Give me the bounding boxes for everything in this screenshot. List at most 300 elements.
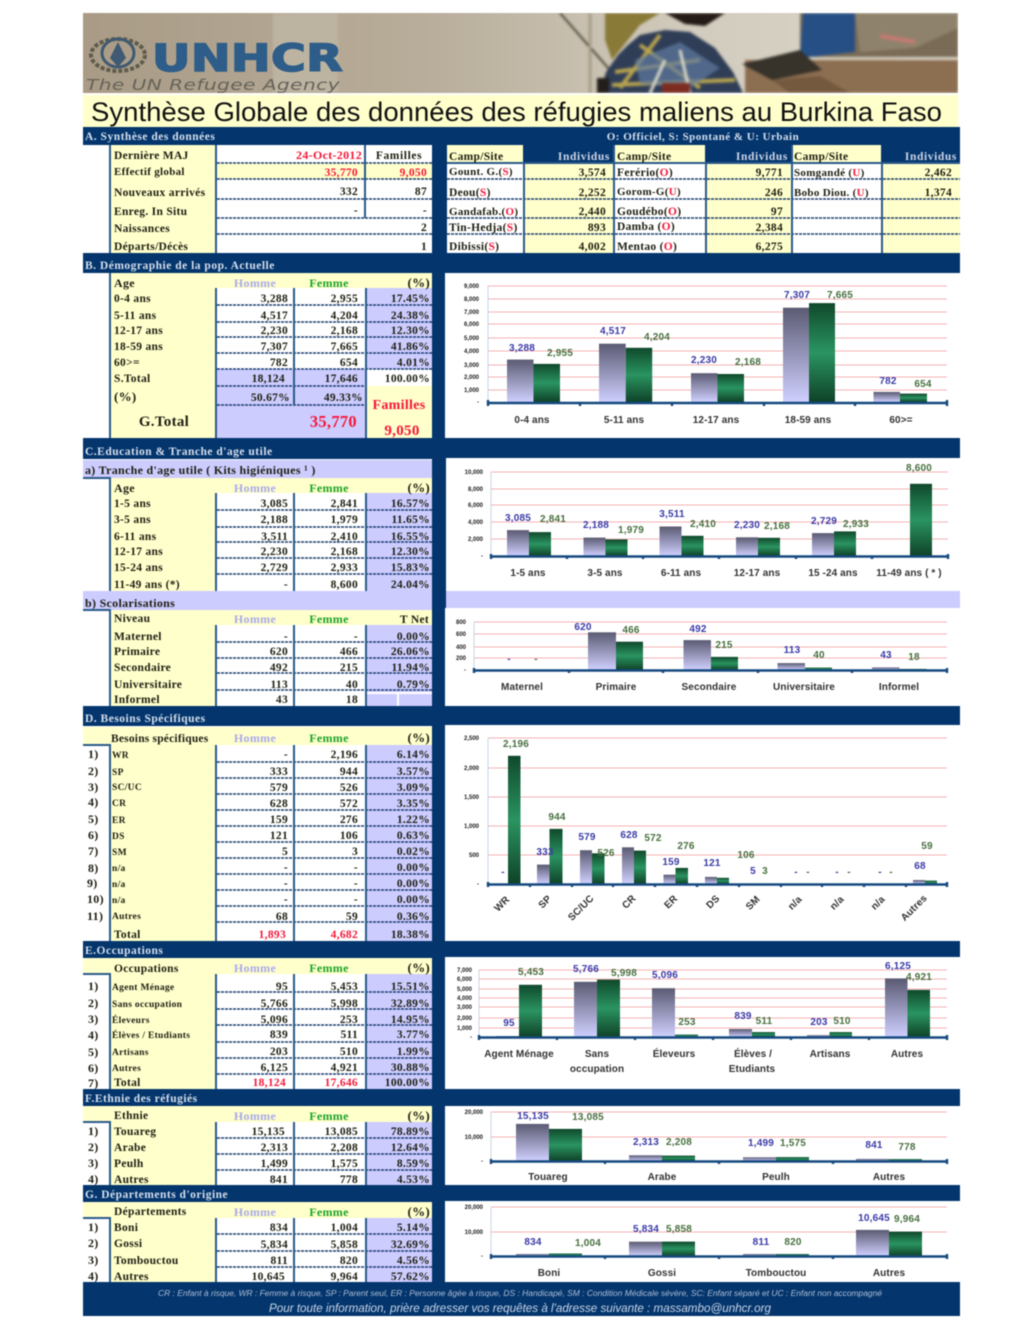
- panel: chart E occupations bars: [445, 957, 960, 1089]
- value labels: 1,575: [780, 1138, 806, 1149]
- axis tick labels: 2,000: [468, 537, 484, 543]
- category labels: Autres: [891, 1049, 923, 1060]
- data rows: 15-24 ans: [114, 562, 163, 574]
- data rows: 4.01%: [397, 357, 430, 369]
- data rows: S.Total: [114, 373, 151, 385]
- axis tick labels: -: [481, 1254, 483, 1260]
- data rows: 159: [270, 814, 288, 826]
- row numbers: 6): [88, 828, 99, 842]
- axis tick labels: 20,000: [465, 1110, 484, 1116]
- value labels: 121: [703, 858, 721, 869]
- data rows: Maternel: [114, 631, 162, 643]
- category labels: [484, 1047, 923, 1075]
- data rows: 18.38%: [391, 929, 430, 941]
- axis tick labels: 2,500: [464, 736, 480, 742]
- category labels: [538, 1268, 905, 1279]
- data rows: 18,124: [252, 373, 285, 385]
- value labels: 7,665: [827, 290, 853, 301]
- category labels, rotated: WR: [492, 894, 513, 914]
- data rows: 5.14%: [397, 1222, 430, 1234]
- axis tick labels: 10,000: [465, 1135, 484, 1141]
- data rows: DS: [112, 832, 125, 842]
- data rows: 57.62%: [391, 1271, 430, 1283]
- values: 9,050: [400, 167, 427, 179]
- data rows: 4,921: [331, 1062, 358, 1074]
- row numbers: 7): [88, 844, 99, 858]
- category labels, rotated: n/a: [828, 894, 847, 912]
- value labels: -: [534, 654, 538, 665]
- header row: [114, 480, 430, 495]
- labels: Nouveaux arrivés: [114, 187, 206, 199]
- camp rows: 1,374: [925, 187, 952, 199]
- value labels: 4,204: [644, 332, 670, 343]
- value labels: 7,307: [784, 290, 810, 301]
- row numbers: [87, 747, 104, 923]
- photo scene: tent, woman, basin and ground: [273, 13, 958, 93]
- data rows: 11-49 ans (*): [114, 579, 180, 591]
- data rows: 0.00%: [397, 894, 430, 906]
- value labels: 5,834: [633, 1224, 659, 1235]
- axis tick labels: 6,000: [457, 977, 473, 983]
- values: -: [354, 205, 358, 217]
- value labels: 113: [784, 645, 801, 656]
- data rows: 2,729: [261, 562, 288, 574]
- header row: Femme: [309, 961, 349, 975]
- data rows: 466: [340, 646, 358, 658]
- row numbers: 6): [88, 1061, 99, 1075]
- data rows: 43: [276, 694, 288, 706]
- header row: (%): [407, 730, 430, 745]
- data rows: 3,085: [261, 498, 288, 510]
- data rows: 0.02%: [397, 846, 430, 858]
- data rows: 8.59%: [397, 1158, 430, 1170]
- data rows: 215: [340, 662, 358, 674]
- sub-heading: useful age band: [83, 460, 432, 478]
- data rows: 5,858: [331, 1239, 358, 1251]
- header row: (%): [407, 275, 430, 290]
- data rows: 5-11 ans: [114, 310, 157, 322]
- header row: [114, 960, 430, 975]
- axis tick labels: [465, 470, 484, 560]
- data rows: 579: [270, 782, 288, 794]
- category labels: [528, 1172, 905, 1183]
- data rows: 778: [340, 1174, 358, 1186]
- data rows: 2,313: [261, 1142, 288, 1154]
- data rows: ER: [112, 816, 126, 826]
- value labels: 2,955: [547, 348, 573, 359]
- data rows: 113: [270, 679, 288, 691]
- data rows: 40: [346, 679, 358, 691]
- camp rows: Goudébo(O): [617, 206, 681, 218]
- data rows: 24.04%: [391, 579, 430, 591]
- data rows: 3.09%: [397, 782, 430, 794]
- values: -: [423, 205, 427, 217]
- data rows: 2,410: [331, 531, 358, 543]
- abbreviation key: CR : Enfant à risque, WR : Femme à risque, SP : Parent seul, ER : Personne âgée à risque, DS : Handicapé, SM : Condition Médicale sévère, SC: Enfant séparé et UC : Enfant non accompagné: [158, 1289, 883, 1298]
- data rows: 12.30%: [391, 325, 430, 337]
- data rows: 782: [270, 357, 288, 369]
- category labels: 12-17 ans: [693, 415, 740, 426]
- category labels: Tombouctou: [746, 1268, 806, 1279]
- row numbers: 5): [88, 1045, 99, 1059]
- data rows: 3,511: [261, 531, 288, 543]
- category labels: Artisans: [810, 1049, 851, 1060]
- data rows: 11.94%: [391, 662, 430, 674]
- value labels: 628: [620, 830, 638, 841]
- data rows: 510: [340, 1046, 358, 1058]
- value labels: 944: [548, 812, 566, 823]
- data rows: 4,517: [261, 310, 288, 322]
- grand total: G.Total: [139, 414, 189, 430]
- data rows: 12-17 ans: [114, 546, 163, 558]
- column headers: [449, 151, 957, 163]
- axis tick labels: 4,000: [468, 520, 484, 526]
- category labels: 5-11 ans: [604, 415, 644, 426]
- value labels: 5,858: [666, 1224, 692, 1235]
- labels: Enreg. In Situ: [114, 206, 188, 218]
- data rows: Universitaire: [114, 679, 182, 691]
- data rows: 620: [270, 646, 288, 658]
- category labels: [510, 568, 942, 579]
- category labels: Éleveurs: [653, 1047, 696, 1060]
- header row: Homme: [234, 731, 276, 745]
- labels: [114, 150, 206, 253]
- data rows: 2,208: [331, 1142, 358, 1154]
- header row: Homme: [234, 1205, 276, 1219]
- row numbers: [88, 979, 99, 1090]
- column headers: Camp/Site: [617, 151, 671, 163]
- value labels: 579: [578, 832, 596, 843]
- axis tick labels: 1,000: [457, 1026, 473, 1032]
- row numbers: 2): [88, 996, 99, 1010]
- value labels: 572: [644, 833, 662, 844]
- axis tick labels: 8,000: [468, 487, 484, 493]
- data rows: 944: [340, 766, 358, 778]
- header row: (%): [407, 960, 430, 975]
- category labels, rotated: n/a: [869, 894, 888, 912]
- data rows: 5,998: [331, 998, 358, 1010]
- section B heading: B. Démographie de la pop. Actuelle: [85, 260, 275, 272]
- data rows: 253: [340, 1014, 358, 1026]
- axis tick labels: 9,000: [464, 284, 480, 290]
- category labels: Etudiants: [729, 1064, 776, 1075]
- value labels: 620: [574, 622, 592, 633]
- data rows: 13,085: [325, 1126, 358, 1138]
- data rows: [88, 1124, 430, 1186]
- camp rows: 2,462: [925, 167, 952, 179]
- value labels: [524, 1213, 920, 1249]
- category labels: [501, 682, 919, 693]
- section F heading: F.Ethnie des réfugiés: [85, 1093, 198, 1105]
- value labels: [501, 739, 933, 878]
- data rows: 6.14%: [397, 749, 430, 761]
- value labels: 8,600: [906, 463, 932, 474]
- navy page frame: gutter and section bars: [83, 127, 960, 1316]
- column headers: Individus: [905, 151, 957, 163]
- column headers: Individus: [558, 151, 610, 163]
- axis tick labels: 2,000: [457, 1016, 473, 1022]
- data rows: 811: [270, 1255, 288, 1267]
- values: 35,770: [325, 167, 358, 179]
- data rows: 2,188: [261, 514, 288, 526]
- data rows: 1): [88, 1220, 99, 1234]
- grand total: 35,770: [310, 412, 357, 431]
- data rows: Autres: [114, 1271, 149, 1283]
- data rows: Élèves / Etudiants: [112, 1029, 190, 1041]
- camp rows: 2,440: [579, 206, 606, 218]
- data rows: 0.63%: [397, 830, 430, 842]
- column headers: Individus: [736, 151, 788, 163]
- data rows: n/a: [112, 864, 126, 874]
- value labels: 40: [813, 650, 825, 661]
- data rows: 0-4 ans: [114, 293, 151, 305]
- panel: B demography table: [110, 273, 432, 439]
- axis tick labels: 600: [456, 632, 467, 638]
- values: [296, 148, 427, 253]
- data rows: 6,125: [261, 1062, 288, 1074]
- data rows: 49.33%: [324, 392, 363, 404]
- header row: [111, 730, 430, 745]
- grand total: [139, 412, 357, 431]
- axis tick labels: 10,000: [465, 470, 484, 476]
- data rows: 12.30%: [391, 546, 430, 558]
- value labels: [505, 463, 932, 536]
- value labels: 253: [678, 1017, 696, 1028]
- axis tick labels: -: [481, 554, 483, 560]
- data rows: Secondaire: [114, 662, 171, 674]
- data rows: 3,288: [261, 293, 288, 305]
- panel: chart C-a useful age bars: [446, 458, 960, 591]
- axis tick labels: 400: [456, 645, 467, 651]
- panel: C-b schooling table: [83, 610, 432, 706]
- families callout: Familles: [373, 398, 426, 413]
- data rows: Informel: [114, 694, 160, 706]
- category labels: Sans: [585, 1049, 609, 1060]
- data rows: 1,499: [261, 1158, 288, 1170]
- data rows: Tombouctou: [114, 1255, 179, 1267]
- data rows: 4.53%: [397, 1174, 430, 1186]
- category labels: Élèves /: [734, 1047, 772, 1060]
- row numbers: 1): [88, 979, 99, 993]
- axis tick labels: 7,000: [464, 310, 480, 316]
- camp rows: 893: [588, 222, 606, 234]
- icon: UNHCR emblem: [91, 39, 145, 71]
- value labels: 820: [784, 1237, 802, 1248]
- data rows: Autres: [112, 1064, 141, 1074]
- value labels: 811: [753, 1237, 770, 1248]
- panel: chart B age bars: [445, 273, 960, 438]
- data rows: 32.69%: [391, 1239, 430, 1251]
- data rows: 14.95%: [391, 1014, 430, 1026]
- sub-heading: schooling band: [83, 591, 960, 610]
- data rows: Autres: [112, 912, 141, 922]
- category labels, rotated: Autres: [899, 893, 930, 924]
- axis tick labels: 4,000: [457, 996, 473, 1002]
- value labels: 510: [833, 1016, 851, 1027]
- data rows: 2): [88, 1140, 99, 1154]
- data rows: 2,933: [331, 562, 358, 574]
- data rows: SP: [112, 768, 124, 778]
- data rows: 15,135: [252, 1126, 285, 1138]
- axis tick labels: 10,000: [465, 1230, 484, 1236]
- camp rows: Bobo Diou. (U): [794, 187, 869, 199]
- data rows: 5,096: [261, 1014, 288, 1026]
- category labels: Informel: [879, 682, 919, 693]
- data rows: 2,196: [331, 749, 358, 761]
- value labels: 2,313: [633, 1137, 659, 1148]
- data rows: -: [284, 631, 288, 643]
- camp rows: Tin-Hedja(S): [449, 222, 518, 234]
- panel: chart G departments bars: [445, 1201, 960, 1282]
- data rows: 4,204: [331, 310, 358, 322]
- data rows: (%): [114, 389, 137, 404]
- value labels: 276: [677, 841, 695, 852]
- data rows: 839: [270, 1029, 288, 1041]
- axis tick labels: 800: [456, 620, 467, 626]
- data rows: 511: [340, 1029, 358, 1041]
- bars: [588, 632, 926, 670]
- data rows: 2,168: [331, 546, 358, 558]
- category labels: Secondaire: [682, 682, 737, 693]
- data rows: 17,646: [325, 373, 358, 385]
- data rows: 1.99%: [397, 1046, 430, 1058]
- data rows: SC/UC: [112, 783, 142, 793]
- category labels: Boni: [538, 1268, 560, 1279]
- category labels: Maternel: [501, 682, 543, 693]
- header row: Ethnie: [114, 1110, 148, 1122]
- axis tick labels: 1,000: [464, 388, 480, 394]
- header row: Age: [114, 276, 135, 290]
- header row: Homme: [234, 481, 276, 495]
- value labels: -: [501, 867, 505, 878]
- row numbers: 4): [88, 795, 99, 809]
- value labels: -: [835, 867, 839, 878]
- header row: Femme: [309, 276, 349, 290]
- camp rows: 6,275: [756, 241, 783, 253]
- axis tick labels: 200: [456, 656, 467, 662]
- data rows: Primaire: [114, 646, 160, 658]
- data rows: 68: [276, 911, 288, 923]
- axis tick labels: 5,000: [464, 336, 480, 342]
- data rows: Agent Ménage: [112, 983, 174, 993]
- header row: Age: [114, 481, 135, 495]
- header row: Femme: [309, 1205, 349, 1219]
- data rows: 10,645: [252, 1271, 285, 1283]
- axis tick labels: 7,000: [457, 968, 473, 974]
- value labels: 159: [662, 857, 680, 868]
- category labels: Primaire: [596, 682, 637, 693]
- category labels: 18-59 ans: [785, 415, 832, 426]
- axis tick labels: [456, 620, 467, 674]
- data rows: 15.51%: [391, 981, 430, 993]
- header row: Femme: [309, 481, 349, 495]
- row numbers: 4): [88, 1028, 99, 1042]
- data rows: 50.67%: [251, 392, 290, 404]
- value labels: 6,125: [885, 961, 911, 972]
- value labels: 5: [750, 866, 756, 877]
- category labels: Arabe: [648, 1172, 677, 1183]
- row numbers: 10): [87, 892, 104, 906]
- category labels: 0-4 ans: [514, 415, 550, 426]
- value labels: 15,135: [517, 1111, 549, 1122]
- logo wordmark: UNHCR: [152, 37, 343, 80]
- data rows: 106: [340, 830, 358, 842]
- axis tick labels: 2,000: [464, 375, 480, 381]
- data rows: 17.45%: [391, 293, 430, 305]
- data rows: 15.83%: [391, 562, 430, 574]
- bars: [496, 978, 930, 1037]
- data rows: 3.35%: [397, 798, 430, 810]
- data rows: 1): [88, 1124, 99, 1138]
- header row: Femme: [309, 731, 349, 745]
- category labels, rotated: DS: [704, 893, 722, 911]
- data rows: 7,307: [261, 341, 288, 353]
- header row: Femme: [309, 1109, 349, 1123]
- value labels: 5,096: [652, 970, 678, 981]
- data rows: -: [284, 579, 288, 591]
- data rows: -: [284, 878, 288, 890]
- data rows: WR: [112, 751, 129, 761]
- value labels: 3: [762, 866, 768, 877]
- header row: [114, 1108, 430, 1123]
- header row: Besoins spécifiques: [111, 733, 209, 745]
- data rows: 59: [346, 911, 358, 923]
- data rows: 32.89%: [391, 998, 430, 1010]
- header row: Homme: [234, 612, 276, 626]
- value labels: 59: [921, 841, 933, 852]
- data rows: [112, 981, 430, 1089]
- axis tick labels: 6,000: [464, 322, 480, 328]
- data rows: 0.36%: [397, 911, 430, 923]
- data rows: 4,682: [331, 929, 358, 941]
- title band: Synthèse Globale des données des réfugies maliens au Burkina Faso: [91, 97, 942, 127]
- header row: (%): [407, 1204, 430, 1219]
- panel: A camps table: [447, 145, 960, 253]
- axis tick labels: 3,000: [464, 363, 480, 369]
- data rows: 12.64%: [391, 1142, 430, 1154]
- axis tick labels: 500: [469, 853, 480, 859]
- value labels: 654: [914, 379, 932, 390]
- data rows: -: [354, 878, 358, 890]
- data rows: 841: [270, 1174, 288, 1186]
- value labels: 43: [880, 650, 892, 661]
- panel: G departments table: [83, 1202, 432, 1283]
- data rows: 3: [352, 846, 358, 858]
- value labels: 5,766: [573, 964, 599, 975]
- data rows: 203: [270, 1046, 288, 1058]
- panel: chart D specific needs bars: [445, 725, 960, 941]
- category labels: 3-5 ans: [587, 568, 623, 579]
- value labels: 4,921: [906, 972, 932, 983]
- data rows: 3): [88, 1156, 99, 1170]
- category labels: 60>=: [889, 415, 913, 426]
- data rows: 2,168: [331, 325, 358, 337]
- header photo with UNHCR logo: [83, 13, 958, 94]
- data rows: Gossi: [114, 1238, 143, 1250]
- value labels: 2,196: [503, 739, 529, 750]
- data rows: -: [354, 631, 358, 643]
- section D heading: D. Besoins Spécifiques: [85, 713, 206, 725]
- data rows: 820: [340, 1255, 358, 1267]
- data rows: 9,964: [331, 1271, 358, 1283]
- value labels: 2,188: [583, 520, 609, 531]
- category labels: Touareg: [528, 1172, 568, 1183]
- data rows: 17,646: [325, 1077, 358, 1089]
- category labels: Universitaire: [773, 682, 835, 693]
- panel: C-a age table: [83, 478, 432, 591]
- data rows: 24.38%: [391, 310, 430, 322]
- data rows: 100.00%: [385, 373, 430, 385]
